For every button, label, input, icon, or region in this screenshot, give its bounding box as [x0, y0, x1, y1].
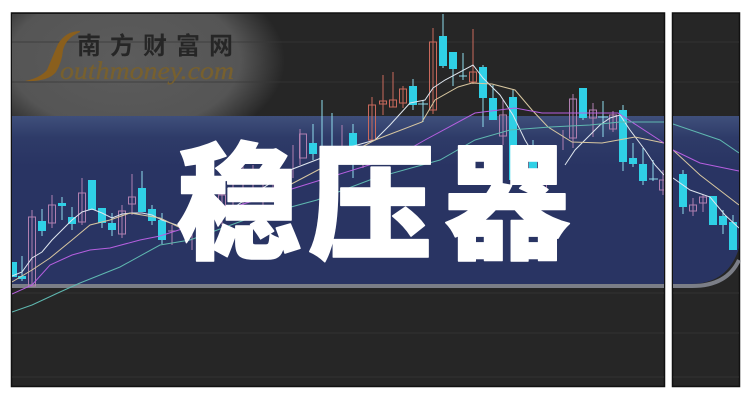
band underline [12, 260, 739, 286]
logo url: outhmoney.com [60, 58, 234, 85]
logo chinese name: 南方财富网 [77, 26, 233, 61]
title: 器 [444, 104, 570, 286]
red candles [368, 28, 476, 140]
blue band right [673, 116, 739, 284]
title [176, 104, 570, 286]
logo swoosh S [25, 31, 80, 81]
falling candle wicks [22, 14, 733, 281]
moving average lines [12, 65, 739, 312]
logo [25, 26, 234, 85]
falling candle bodies [12, 36, 737, 279]
rising candles [28, 94, 706, 286]
title: 压 [308, 104, 434, 286]
blue band left [12, 116, 664, 284]
panel: chart background right [672, 13, 740, 386]
logo glow [12, 14, 302, 116]
candlestick chart [12, 14, 739, 312]
title: 稳 [176, 104, 302, 286]
